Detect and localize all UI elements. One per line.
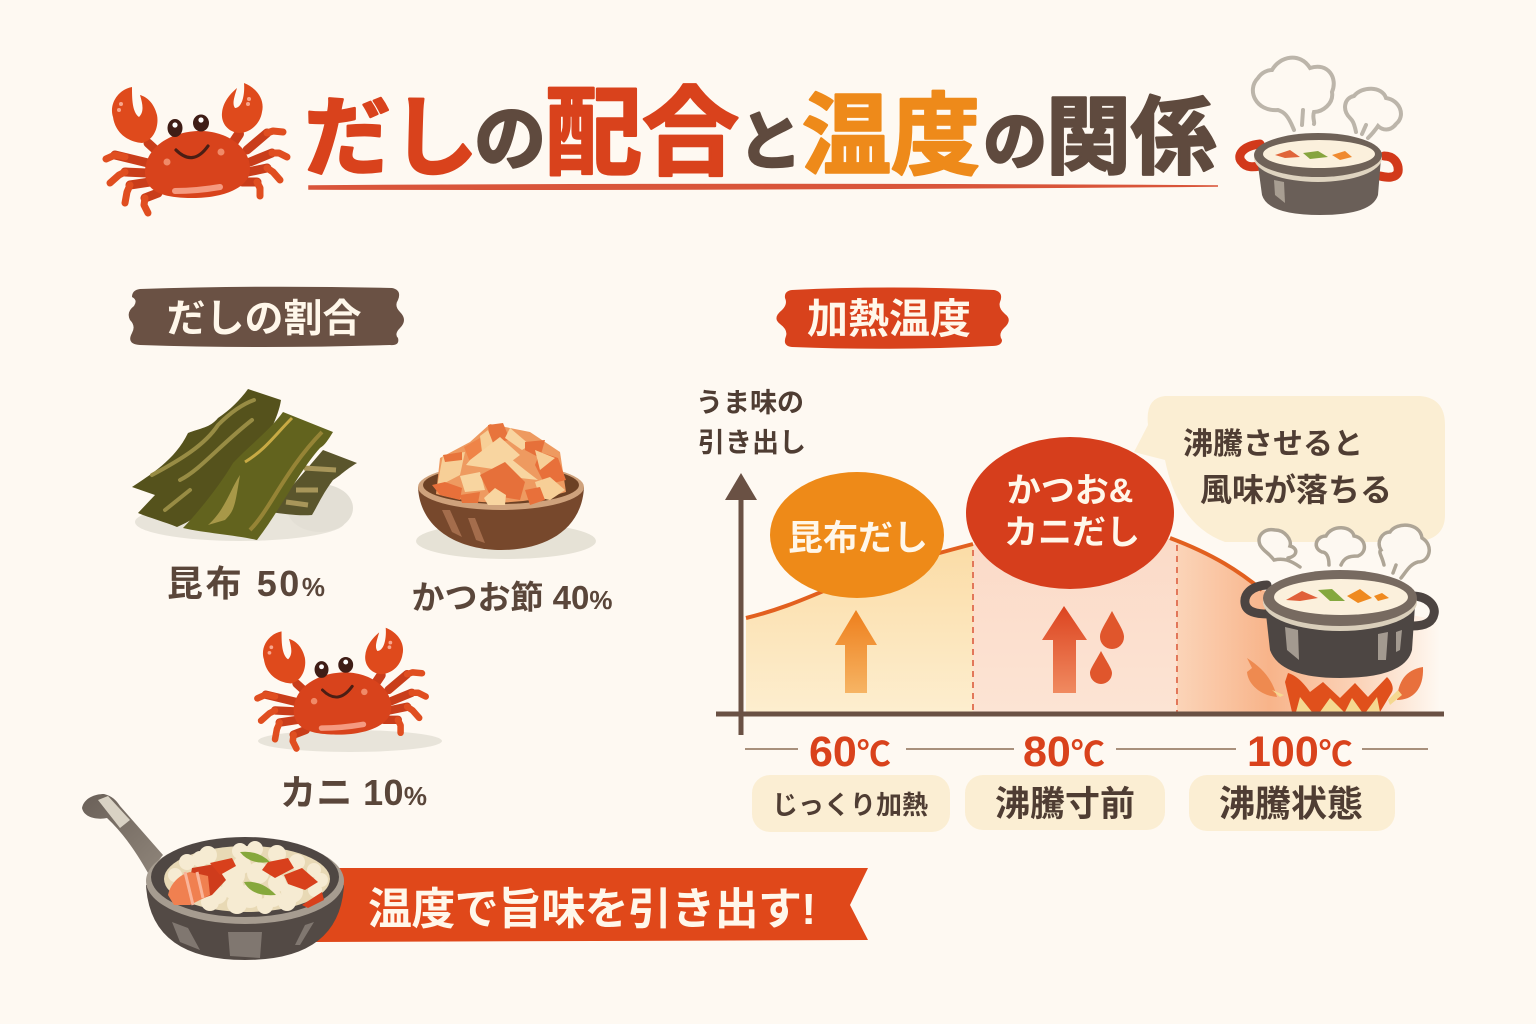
chart area: 80 degrees — [973, 520, 1177, 714]
icon: steaming pot in header — [1240, 58, 1401, 215]
label: 100 degrees: 100℃ — [1247, 728, 1353, 776]
bubble: kombu dashi — [770, 472, 944, 598]
axis label: うま味の — [696, 388, 804, 418]
title: の — [983, 106, 1047, 178]
section tag: ratio: だしの割合 — [166, 298, 362, 341]
icon: flames — [1247, 658, 1423, 712]
umami curve — [746, 538, 1262, 618]
speech bubble: 沸騰させると — [1183, 428, 1363, 461]
banner: extract umami — [315, 868, 868, 942]
section tag: ratio — [129, 287, 404, 347]
chart: heating temperature vs umami — [696, 388, 1445, 735]
label: katsuobushi 40%: かつお節 40% — [412, 579, 612, 616]
bubble: kombu dashi: 昆布だし — [788, 519, 928, 558]
chart area: 100 degrees — [1177, 540, 1440, 714]
label: crab 10%: カニ 10% — [280, 772, 427, 813]
arrow: 60 degrees — [835, 610, 877, 693]
title: 温度 — [802, 86, 980, 186]
icon: crab ingredient — [257, 628, 442, 752]
horizontal axis — [716, 712, 1444, 716]
pill: slow heating: じっくり加熱 — [772, 790, 928, 820]
pill: slow heating — [752, 775, 950, 832]
label: kombu 50%: 昆布 50% — [167, 563, 325, 604]
section tag: heating temperature — [776, 288, 1009, 349]
title: 関係 — [1046, 91, 1216, 186]
axis arrow — [738, 490, 744, 735]
speech bubble — [1134, 396, 1445, 542]
title underline — [309, 184, 1218, 189]
section tag: heating temperature: 加熱温度 — [807, 296, 971, 342]
icon: crab in header — [106, 83, 287, 213]
temperature scale — [745, 728, 1428, 776]
bubble: katsuo and crab dashi: カニだし — [1004, 514, 1140, 552]
label: 60 degrees: 60℃ — [809, 728, 891, 776]
icon: steam — [1259, 525, 1429, 578]
bubble: katsuo and crab dashi — [966, 437, 1174, 589]
title: 配合 — [545, 79, 739, 188]
banner: extract umami: 温度で旨味を引き出す! — [368, 885, 816, 934]
title: の — [474, 100, 546, 180]
ingredient: katsuobushi bowl — [416, 423, 596, 559]
title: と — [738, 106, 802, 178]
pill: just before boiling: 沸騰寸前 — [995, 785, 1135, 824]
title: だし — [304, 90, 478, 187]
pill: boiling: 沸騰状態 — [1219, 783, 1363, 824]
icon: boiling pot — [1245, 570, 1434, 678]
axis arrow head — [725, 473, 757, 500]
bubble: katsuo and crab dashi: かつお& — [1007, 472, 1133, 510]
axis label: 引き出し — [698, 428, 806, 458]
arrow: 80 degrees — [1042, 606, 1087, 693]
icon: drops — [1090, 611, 1124, 684]
ingredient: kombu — [132, 389, 357, 541]
speech bubble: 風味が落ちる — [1200, 472, 1392, 508]
chart area: 60 degrees — [746, 544, 973, 714]
label: 80 degrees: 80℃ — [1023, 728, 1105, 776]
icon: frying pan with rice — [82, 794, 344, 960]
pill: just before boiling — [965, 775, 1165, 830]
pill: boiling — [1189, 775, 1395, 831]
